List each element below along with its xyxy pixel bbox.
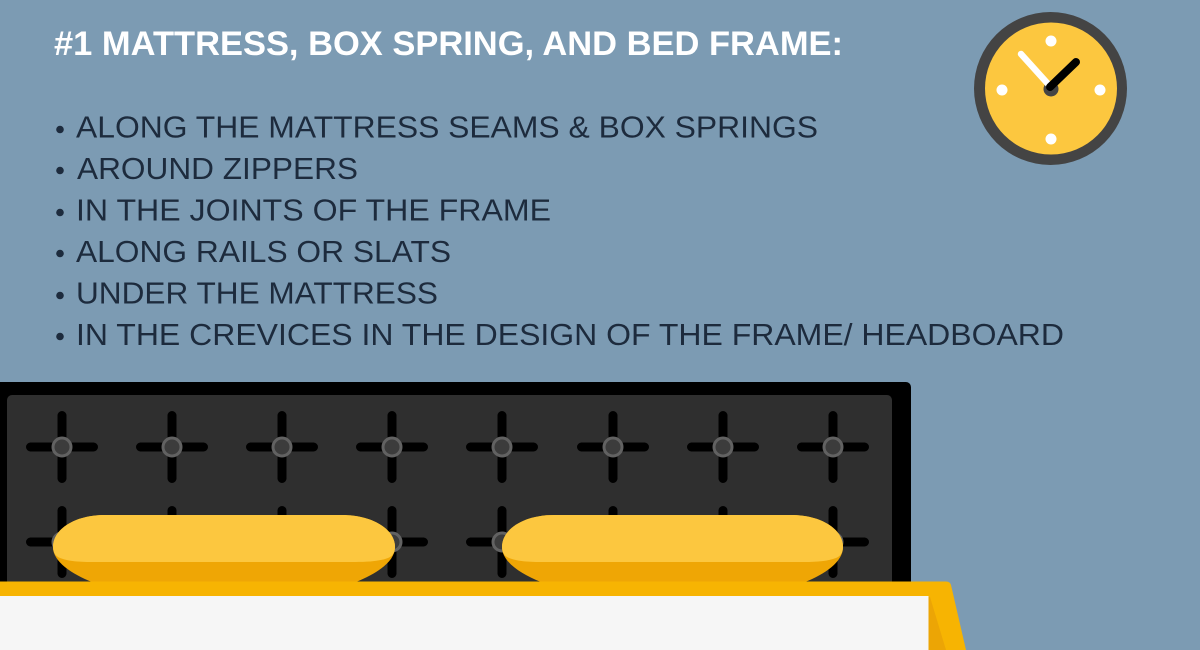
pillow: left	[53, 515, 395, 582]
headboard tufting, bottom row	[30, 510, 864, 574]
bullet list	[56, 110, 1064, 352]
mattress	[0, 596, 928, 650]
bullet list: ALONG RAILS OR SLATS	[76, 234, 451, 269]
bullet list: UNDER THE MATTRESS	[76, 276, 438, 310]
bullet list: IN THE CREVICES IN THE DESIGN OF THE FRAME/ HEADBOARD	[76, 317, 1064, 352]
headboard tufting, top row	[30, 416, 864, 478]
heading: #1 MATTRESS, BOX SPRING, AND BED FRAME:	[54, 25, 843, 63]
mattress frame rail	[0, 582, 966, 650]
icon: clock	[974, 12, 1127, 165]
pillow: right	[502, 515, 843, 582]
frame side shadow	[928, 597, 946, 650]
headboard	[0, 382, 911, 585]
bullet list: IN THE JOINTS OF THE FRAME	[76, 192, 551, 228]
bullet list: AROUND ZIPPERS	[77, 151, 358, 186]
bullet list: ALONG THE MATTRESS SEAMS & BOX SPRINGS	[76, 110, 818, 144]
